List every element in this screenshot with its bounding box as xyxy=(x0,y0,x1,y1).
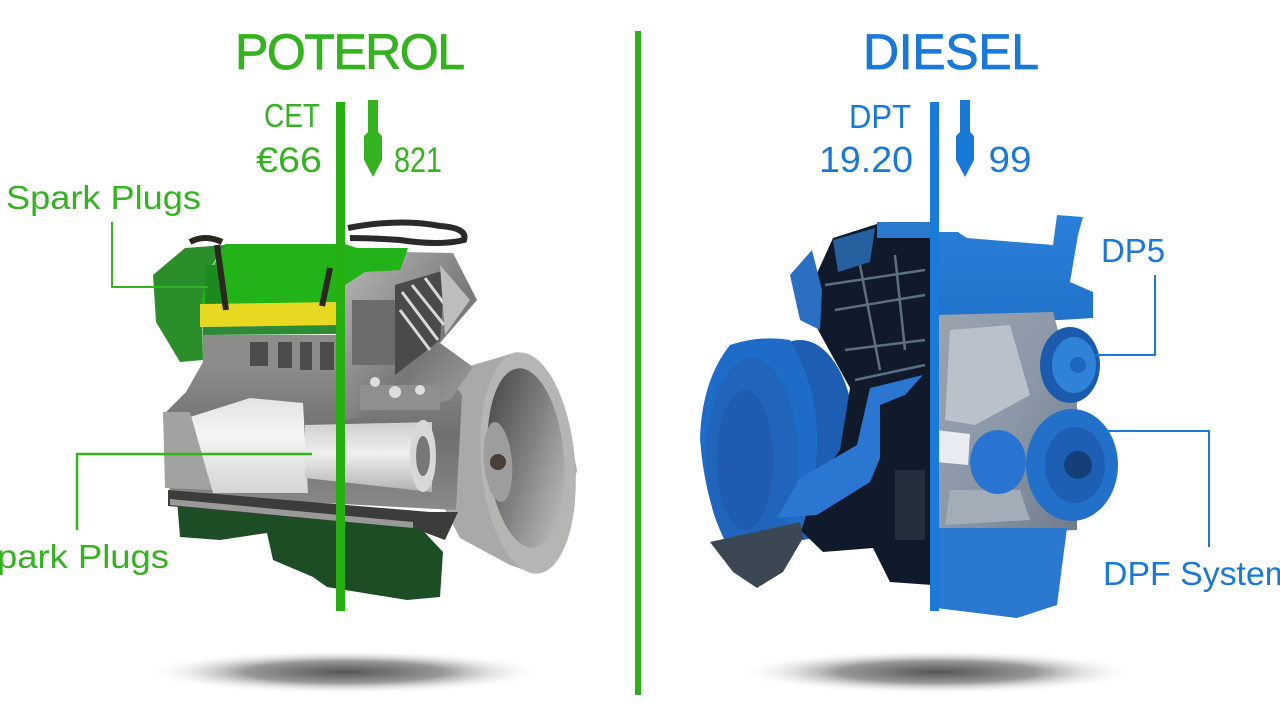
diesel stat: 99: 99 xyxy=(988,139,1032,180)
green strip xyxy=(203,325,336,335)
label: spark plugs top: Spark Plugs xyxy=(6,179,201,216)
diesel axis line xyxy=(930,102,939,611)
blue pipe xyxy=(777,375,923,518)
dark engine core xyxy=(790,222,932,585)
icon: diesel injector xyxy=(956,100,974,177)
green sump xyxy=(177,500,443,600)
dark flywheel base xyxy=(710,522,803,588)
diesel stat: 19.20: 19.20 xyxy=(819,139,913,180)
leader: spark plugs bottom xyxy=(77,454,312,530)
title: diesel: DIESEL xyxy=(863,24,1039,80)
shadow: diesel engine xyxy=(738,650,1138,694)
engine block xyxy=(163,362,462,510)
petrol axis line xyxy=(336,102,345,611)
bell housing xyxy=(440,348,584,578)
left end plate xyxy=(163,412,212,490)
diesel stat: DPT: DPT xyxy=(849,98,911,135)
frame rail xyxy=(168,490,458,540)
rib casting xyxy=(203,335,337,373)
bell housing xyxy=(700,338,817,575)
lower pulley xyxy=(1026,409,1118,521)
centre divider xyxy=(635,31,641,695)
shadow: petrol engine xyxy=(145,650,545,694)
petrol stat: CET: CET xyxy=(264,97,320,134)
leader: DP5 xyxy=(1095,275,1155,355)
green top cover xyxy=(153,244,408,362)
petrol stat: 666: €66 xyxy=(256,141,322,180)
engine: diesel xyxy=(700,215,1118,618)
small pulley xyxy=(970,430,1026,494)
leader: DPF system xyxy=(1105,431,1209,547)
right engine body xyxy=(936,215,1093,536)
large silver cylinder xyxy=(190,398,308,493)
leader: spark plugs top xyxy=(112,222,208,287)
label: DP5: DP5 xyxy=(1101,232,1165,269)
title: petrol: POTEROL xyxy=(235,24,465,80)
label: spark plugs bottom: park Plugs xyxy=(0,538,169,575)
engine: petrol xyxy=(153,222,584,600)
rear housing xyxy=(745,340,855,540)
upper pulley xyxy=(1040,327,1100,403)
petrol stat: 821: 821 xyxy=(394,141,442,180)
small silver cylinder xyxy=(305,420,436,492)
icon: petrol injector xyxy=(364,100,382,177)
yellow band xyxy=(200,302,336,327)
wire harness xyxy=(348,222,464,243)
blue sump xyxy=(936,528,1067,618)
black wires xyxy=(190,238,330,310)
right cylinder head xyxy=(345,252,477,420)
